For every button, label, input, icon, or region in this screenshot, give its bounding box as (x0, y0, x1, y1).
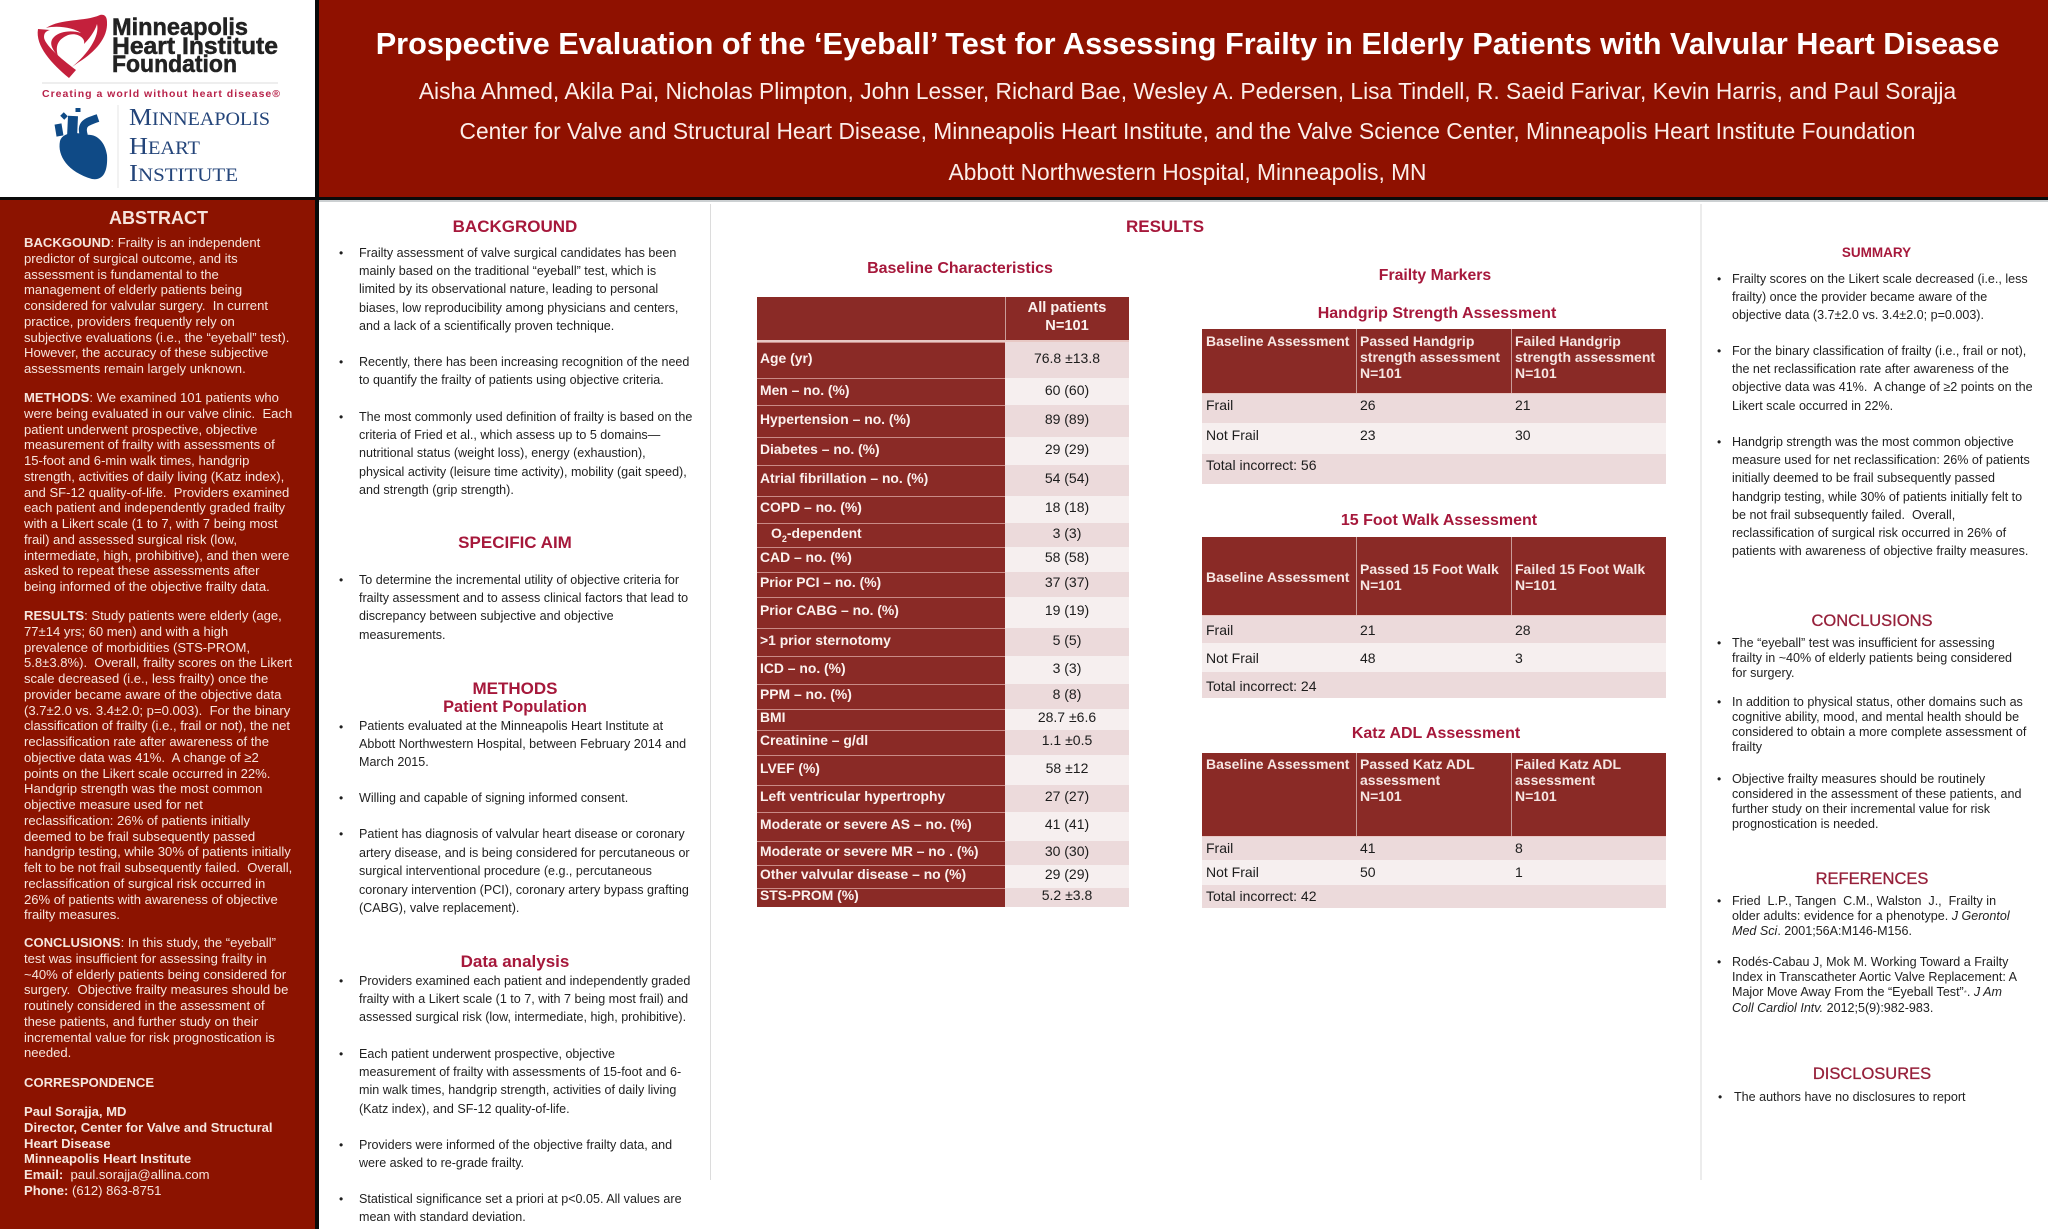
panel: data analysis: • (339, 1138, 343, 1152)
panel: background: • (339, 410, 343, 424)
panel: disclosures: The authors have no disclosures to report (1734, 1090, 1966, 1104)
logo wordmark: Foundation (112, 51, 237, 78)
katz heading: Katz ADL Assessment (1352, 725, 1520, 742)
table: baseline characteristics: 58 ±12 (1046, 760, 1088, 776)
table: baseline characteristics: Prior CABG – no. (%) (760, 602, 899, 618)
panel: methods: Patients evaluated at the Minneapolis Heart Institute at Abbott Northwestern Hospital, between February 2014 and March 2015. (359, 719, 686, 769)
data analysis bullets: • (339, 974, 343, 988)
panel: conclusions: In addition to physical status, other domains such as cognitive ability, mood, and mental health should be considered to obtain a more complete assessment of frailty (1732, 695, 2026, 754)
disclosures heading: DISCLOSURES (1813, 1065, 1931, 1083)
location: Abbott Northwestern Hospital, Minneapolis, MN (949, 159, 1426, 185)
panel: methods: • (339, 827, 343, 841)
logo wordmark: Heart Institute (112, 33, 278, 60)
patient population bullets: • (339, 720, 343, 734)
table: baseline characteristics: Moderate or severe MR – no . (%) (760, 843, 978, 859)
results heading: RESULTS (1126, 217, 1204, 236)
summary bullets: • (1717, 272, 1721, 286)
panel: conclusions: Objective frailty measures should be routinely considered in the assessment of these patients, and further study on their incremental value for risk prognostication is needed. (1732, 772, 2021, 831)
table: baseline characteristics: O2-dependent (771, 525, 862, 544)
panel: references: Rodés-Cabau J, Mok M. Working Toward a Frailty Index in Transcatheter Aortic Valve Replacement: A Major Move Away From the “Eyeball Test”*. J Am Coll Cardiol Intv. 2012;5(9):982-983. (1732, 955, 2017, 1015)
table: katz adl: Baseline Assessment (1206, 756, 1349, 772)
table: baseline characteristics: Left ventricular hypertrophy (760, 788, 945, 804)
table: baseline characteristics (757, 297, 1129, 907)
correspondence heading: CORRESPONDENCE (24, 1075, 154, 1090)
table: baseline characteristics: 5 (5) (1053, 632, 1081, 648)
table: baseline characteristics: 28.7 ±6.6 (1038, 709, 1096, 725)
table: katz adl: 8 (1515, 840, 1523, 856)
abstract methods: METHODS: We examined 101 patients who were being evaluated in our valve clinic. Each patient underwent prospective, objective measurement of frailty with assessments of 15-foot and 6-min walk times, handgrip strength, activities of daily living (Katz index), and SF-12 quality-of-life. Providers examined each patient and independently graded frailty with a Likert scale (1 to 7, with 7 being most frail) and assessed surgical risk (low, intermediate, high, prohibitive), and then were asked to repeat these assessments after being informed of the objective frailty data. (24, 390, 292, 594)
black frame lines (0, 197, 2048, 200)
table: 15 foot walk: Passed 15 Foot Walk N=101 (1360, 561, 1499, 593)
table: baseline characteristics: 29 (29) (1045, 441, 1089, 457)
abstract results: RESULTS: Study patients were elderly (age, 77±14 yrs; 60 men) and with a high prevalence of morbidities (STS-PROM, 5.8±3.8%). Overall, frailty scores on the Likert scale decreased (i.e., less frailty) once the provider became aware of the objective data (3.7±2.0 vs. 3.4±2.0; p=0.003). For the binary classification of frailty (i.e., frail or not), the net reclassification rate after awareness of the objective data was 41%. A change of ≥2 points on the Likert scale occurred in 22%. Handgrip strength was the most common objective measure used for net reclassification: 26% of patients initially deemed to be frail subsequently passed handgrip testing, while 30% of patients initially felt to be not frail subsequently failed. Overall, reclassification of surgical risk occurred in 26% of patients with awareness of objective frailty measures. (24, 608, 292, 922)
table: baseline characteristics: ICD – no. (%) (760, 660, 846, 676)
table: 15 foot walk: 21 (1360, 622, 1376, 638)
table: baseline characteristics: Prior PCI – no. (%) (760, 574, 881, 590)
table: katz adl: Failed Katz ADL assessment N=101 (1515, 756, 1621, 804)
header banner (319, 0, 2048, 197)
panel: references: • (1717, 955, 1721, 969)
table: baseline characteristics: 3 (3) (1053, 660, 1081, 676)
authors: Aisha Ahmed, Akila Pai, Nicholas Plimpton, John Lesser, Richard Bae, Wesley A. Pedersen, Lisa Tindell, R. Saeid Farivar, Kevin Harris, and Paul Sorajja (419, 78, 1956, 104)
logo: Minneapolis Heart Institute: INSTITUTE (129, 160, 238, 187)
affiliation: Center for Valve and Structural Heart Disease, Minneapolis Heart Institute, and the Valve Science Center, Minneapolis Heart Institute Foundation (460, 118, 1915, 144)
table: baseline characteristics: 37 (37) (1045, 574, 1089, 590)
logo tagline: Creating a world without heart disease® (42, 88, 280, 100)
panel: specific aim (339, 533, 688, 642)
panel: disclosures (1718, 1065, 1966, 1104)
table: baseline characteristics: 58 (58) (1045, 549, 1089, 565)
abstract heading: ABSTRACT (109, 208, 208, 228)
frailty markers heading: Frailty Markers (1379, 267, 1491, 284)
table: 15 foot walk: 3 (1515, 650, 1523, 666)
table: 15 foot walk: Failed 15 Foot Walk N=101 (1515, 561, 1645, 593)
table: 15 foot walk: 28 (1515, 622, 1531, 638)
panel: data analysis (339, 952, 690, 1224)
table: baseline characteristics: 54 (54) (1045, 470, 1089, 486)
table: katz adl: Frail (1206, 840, 1233, 856)
table: handgrip strength: 30 (1515, 427, 1531, 443)
panel: data analysis: Statistical significance set a priori at p<0.05. All values are mean with standard deviation. (359, 1192, 682, 1224)
panel: summary: For the binary classification of frailty (i.e., frail or not), the net reclassification rate after awareness of the objective data was 41%. A change of ≥2 points on the Likert scale occurred in 22%. (1732, 344, 2033, 413)
panel: abstract (0, 200, 315, 1229)
table: katz adl: 1 (1515, 864, 1523, 880)
logo: Minneapolis Heart Institute: MINNEAPOLIS (129, 104, 270, 131)
table: baseline characteristics: 8 (8) (1053, 686, 1081, 702)
disclosure text: • (1718, 1090, 1722, 1104)
table: baseline characteristics: 1.1 ±0.5 (1042, 732, 1092, 748)
table: katz adl: Not Frail (1206, 864, 1259, 880)
panel: references (1717, 870, 2017, 1015)
table: baseline characteristics: 3 (3) (1053, 525, 1081, 541)
table: baseline characteristics: LVEF (%) (760, 760, 820, 776)
panel: summary: Frailty scores on the Likert scale decreased (i.e., less frailty) once the provider became aware of the objective data (3.7±2.0 vs. 3.4±2.0; p=0.003). (1732, 272, 2028, 322)
table: 15 foot walk: Baseline Assessment (1206, 569, 1349, 585)
panel: references: Fried L.P., Tangen C.M., Walston J., Frailty in older adults: evidence for a phenotype. J Gerontol Med Sci. 2001;56A:M146-M156. (1732, 894, 2010, 938)
table: baseline characteristics: 30 (30) (1045, 843, 1089, 859)
table: baseline characteristics: Creatinine – g/dl (760, 732, 868, 748)
panel: summary: • (1717, 435, 1721, 449)
panel: methods: Patient has diagnosis of valvular heart disease or coronary artery disease, and is being considered for percutaneous or surgical interventional procedure (e.g., percutaneous coronary intervention (PCI), coronary artery bypass grafting (CABG), valve replacement). (359, 827, 690, 915)
panel: summary: Handgrip strength was the most common objective measure used for net reclassification: 26% of patients initially deemed to be frail subsequently passed handgrip testing, while 30% of patients initially felt to be not frail subsequently failed. Overall, reclassification of surgical risk occurred in 26% of patients with awareness of objective frailty measures. (1732, 435, 2030, 558)
table: 15 foot walk (1202, 537, 1666, 698)
panel: background: • (339, 355, 343, 369)
references heading: REFERENCES (1816, 870, 1928, 888)
conclusions bullets: • (1717, 636, 1721, 650)
baseline characteristics heading: Baseline Characteristics (867, 260, 1053, 277)
table: katz adl: Passed Katz ADL assessment N=101 (1360, 756, 1475, 804)
table: baseline characteristics: 18 (18) (1045, 499, 1089, 515)
panel: data analysis: Providers were informed of the objective frailty data, and were asked to re-grade frailty. (359, 1138, 672, 1170)
panel: conclusions: The “eyeball” test was insufficient for assessing frailty in ~40% of elderly patients being considered for surgery. (1732, 636, 2012, 680)
reference list: • (1717, 894, 1721, 908)
specific aim text: • (339, 573, 343, 587)
summary heading: SUMMARY (1842, 245, 1911, 260)
table: handgrip strength: Frail (1206, 397, 1233, 413)
table: katz adl: 41 (1360, 840, 1376, 856)
panel: summary (1717, 245, 2033, 558)
logos panel (0, 0, 315, 197)
table: handgrip strength: 23 (1360, 427, 1376, 443)
logo wordmark (112, 14, 278, 78)
table: handgrip strength: Baseline Assessment (1206, 333, 1349, 349)
table: baseline characteristics: 76.8 ±13.8 (1034, 350, 1100, 366)
panel: summary: • (1717, 344, 1721, 358)
table: katz adl: Total incorrect: 42 (1206, 888, 1316, 904)
panel: methods: Willing and capable of signing informed consent. (359, 791, 628, 805)
table: baseline characteristics: COPD – no. (%) (760, 499, 862, 515)
table: baseline characteristics: 89 (89) (1045, 411, 1089, 427)
panel: conclusions (1717, 612, 2026, 831)
icon: red heart logo (38, 15, 107, 78)
panel: data analysis: • (339, 1192, 343, 1206)
table: katz adl: 50 (1360, 864, 1376, 880)
panel: data analysis: Providers examined each patient and independently graded frailty with a Likert scale (1 to 7, with 7 being most frail) and assessed surgical risk (low, intermediate, high, prohibitive). (359, 974, 690, 1024)
table: baseline characteristics: 41 (41) (1045, 816, 1089, 832)
table: katz adl (1202, 753, 1666, 908)
panel: methods: • (339, 791, 343, 805)
methods heading: METHODS (472, 679, 558, 698)
table: baseline characteristics: Men – no. (%) (760, 382, 850, 398)
background heading: BACKGROUND (453, 217, 577, 236)
table: handgrip strength: 21 (1515, 397, 1531, 413)
panel: data analysis: Each patient underwent prospective, objective measurement of frailty with assessments of 15-foot and 6- min walk times, handgrip strength, activities of daily living (Katz index), and SF-12 quality-of-life. (359, 1047, 681, 1116)
panel: data analysis: • (339, 1047, 343, 1061)
table header (757, 297, 1129, 342)
logo: Minneapolis Heart Institute (129, 104, 270, 187)
table: baseline characteristics: Other valvular disease – no (%) (760, 866, 966, 882)
table: baseline characteristics: >1 prior sternotomy (760, 632, 891, 648)
table: baseline characteristics: PPM – no. (%) (760, 686, 852, 702)
panel: background: Recently, there has been increasing recognition of the need to quantify the frailty of patients using objective criteria. (359, 355, 689, 387)
patient population subheading: Patient Population (443, 698, 587, 716)
table: 15 foot walk: Frail (1206, 622, 1233, 638)
table: handgrip strength: Passed Handgrip strength assessment N=101 (1360, 333, 1500, 381)
panel: conclusions: • (1717, 772, 1721, 786)
table: baseline characteristics: Atrial fibrillation – no. (%) (760, 470, 928, 486)
table header: All patients (1028, 300, 1106, 316)
table: handgrip strength (1202, 329, 1666, 484)
table: handgrip strength: Total incorrect: 56 (1206, 457, 1316, 473)
logo wordmark: Minneapolis (112, 14, 248, 41)
background bullets: • (339, 246, 343, 260)
table: baseline characteristics: STS-PROM (%) (760, 887, 859, 903)
conclusions heading: CONCLUSIONS (1811, 612, 1933, 630)
table: baseline characteristics: Hypertension – no. (%) (760, 411, 910, 427)
table: handgrip strength: 26 (1360, 397, 1376, 413)
correspondence details: Paul Sorajja, MD Director, Center for Valve and Structural Heart Disease Minneapolis Heart Institute Email: paul.sorajja@allina.com Phone: (612) 863-8751 (24, 1104, 273, 1198)
logo: Minneapolis Heart Institute: HEART (129, 133, 200, 160)
abstract background: BACKGOUND: Frailty is an independent predictor of surgical outcome, and its assessment is fundamental to the management of elderly patients being considered for valvular surgery. In current practice, providers frequently rely on subjective evaluations (i.e., the “eyeball” test). However, the accuracy of these subjective assessments remain largely unknown. (24, 235, 289, 376)
table: 15 foot walk: Total incorrect: 24 (1206, 678, 1316, 694)
table: baseline characteristics: Diabetes – no. (%) (760, 441, 880, 457)
table: 15 foot walk: Not Frail (1206, 650, 1259, 666)
panel: methods (339, 679, 690, 915)
title: Prospective Evaluation of the ‘Eyeball’ Test for Assessing Frailty in Elderly Patients with Valvular Heart Disease (376, 26, 1999, 61)
table: handgrip strength: Failed Handgrip strength assessment N=101 (1515, 333, 1655, 381)
table: 15 foot walk: 48 (1360, 650, 1376, 666)
table: baseline characteristics: 29 (29) (1045, 866, 1089, 882)
handgrip heading: Handgrip Strength Assessment (1318, 305, 1556, 322)
panel: specific aim: To determine the incremental utility of objective criteria for frailty assessment and to assess clinical factors that lead to discrepancy between subjective and objective measurements. (359, 573, 688, 642)
table: baseline characteristics: 19 (19) (1045, 602, 1089, 618)
table: baseline characteristics: Moderate or severe AS – no. (%) (760, 816, 972, 832)
table: baseline characteristics: BMI (760, 709, 785, 725)
data analysis heading: Data analysis (461, 952, 569, 971)
table header: N=101 (1045, 318, 1089, 334)
abstract conclusions: CONCLUSIONS: In this study, the “eyeball” test was insufficient for assessing frailty in ~40% of elderly patients being considered for surgery. Objective frailty measures should be routinely considered in the assessment of these patients, and further study on their incremental value for risk prognostication is needed. (24, 935, 288, 1060)
table: baseline characteristics: 5.2 ±3.8 (1042, 887, 1092, 903)
table: baseline characteristics: 60 (60) (1045, 382, 1089, 398)
panel: background (339, 217, 692, 497)
table: baseline characteristics: Age (yr) (760, 350, 812, 366)
panel: background: Frailty assessment of valve surgical candidates has been mainly based on the traditional “eyeball” test, which is limited by its observational nature, leading to personal biases, low reproducibility among physicians and centers, and a lack of a scientifically proven technique. (359, 246, 678, 333)
panel: conclusions: • (1717, 695, 1721, 709)
table: baseline characteristics: 27 (27) (1045, 788, 1089, 804)
table: handgrip strength: Not Frail (1206, 427, 1259, 443)
icon: blue anatomical heart (58, 108, 107, 179)
specific aim heading: SPECIFIC AIM (458, 533, 572, 552)
table: baseline characteristics: CAD – no. (%) (760, 549, 852, 565)
panel: background: The most commonly used definition of frailty is based on the criteria of Fried et al., which assess up to 5 domains— nutritional status (weight loss), energy (exhaustion), physical activity (leisure time activity), mobility (gait speed), and strength (grip strength). (359, 410, 692, 497)
15 foot walk heading: 15 Foot Walk Assessment (1341, 512, 1537, 529)
